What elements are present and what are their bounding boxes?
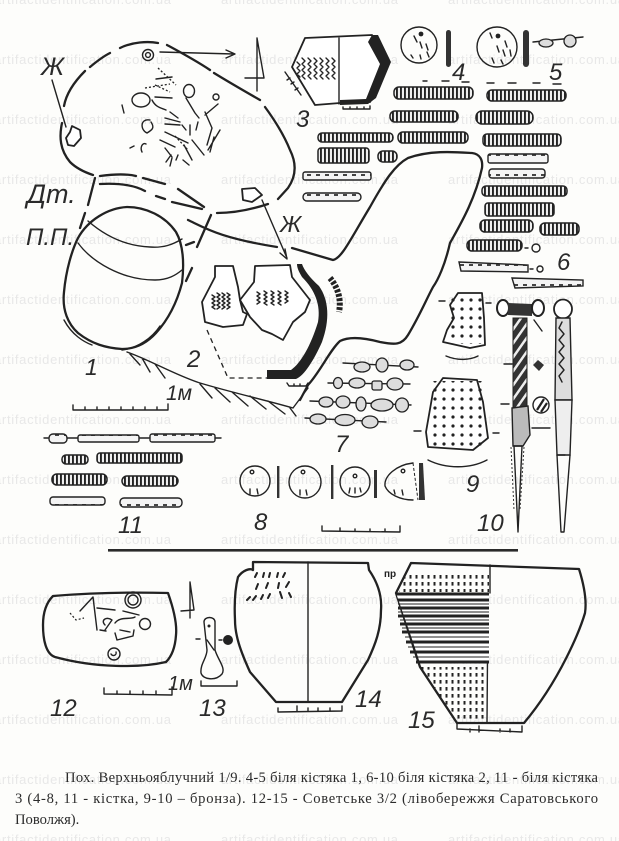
figure 3: vessel — [285, 35, 391, 133]
watermark grid: artifactidentification.com.ua — [221, 352, 399, 367]
figure 12: lower burial plan: 12 — [50, 695, 77, 722]
watermark grid: artifactidentification.com.ua — [221, 652, 399, 667]
figure 4: disc and label — [401, 27, 465, 86]
figure 10: hammer-headed pin and second pin: 10 — [477, 510, 504, 537]
scale bar 1m — [73, 382, 192, 410]
dromos dashed lines — [80, 174, 211, 281]
figure 15: decorated vessel: пр — [384, 569, 396, 580]
caption: Поволжя). — [15, 812, 79, 828]
caption: 3 (4-8, 11 - кістка, 9-10 – бронза). 12-15 - Советське 3/2 (лівобережжя Саратовського — [15, 791, 598, 807]
figure 15: decorated vessel: 15 — [408, 707, 435, 734]
figure 9: dotted bronze sheet — [414, 378, 499, 498]
north arrow small — [181, 582, 194, 618]
watermark grid: artifactidentification.com.ua — [221, 592, 399, 607]
sloping ground hatching — [127, 352, 308, 416]
watermark grid: artifactidentification.com.ua — [221, 52, 399, 67]
watermark grid: artifactidentification.com.ua — [221, 172, 399, 187]
lower Zh marker — [242, 188, 303, 259]
orientation label: Дт. — [24, 179, 76, 209]
figure 10: hammer-headed pin and second pin — [477, 300, 572, 537]
skeleton remains — [122, 68, 220, 166]
upper dotted sherd — [439, 293, 491, 359]
scale bar 1m: 1м — [166, 382, 192, 405]
ring with arrow — [142, 50, 235, 60]
figure 2: vessels — [186, 264, 327, 386]
figure 5: disc and beads — [477, 27, 583, 86]
upper Zh marker — [39, 53, 81, 146]
upper Zh marker: Ж — [39, 53, 66, 81]
watermark grid: artifactidentification.com.ua — [221, 232, 399, 247]
bead strings 6 — [303, 87, 583, 288]
scale bar 1m lower — [104, 673, 193, 695]
north arrow — [245, 38, 264, 91]
figure 3: vessel: 3 — [296, 106, 310, 133]
irregular chamber outline — [188, 152, 482, 400]
watermark grid: artifactidentification.com.ua — [221, 292, 399, 307]
figure 2: vessels: 2 — [186, 346, 200, 373]
lower Zh marker: Ж — [279, 211, 303, 237]
small bead chain — [330, 278, 340, 312]
watermark grid: artifactidentification.com.ua — [221, 472, 399, 487]
figure 8: perforated discs — [240, 463, 425, 536]
figure 8: perforated discs: 8 — [254, 509, 268, 536]
dash marks — [423, 81, 561, 84]
divider line — [108, 549, 518, 552]
large oval pit — [64, 207, 183, 349]
figure 1: burial plan — [24, 38, 303, 350]
figure 7: bead strings — [305, 358, 418, 458]
figure 11: bead strings — [44, 434, 221, 539]
figure 15: decorated vessel — [384, 563, 586, 734]
depth label: П.П. — [26, 224, 74, 251]
figure number 1: 1 — [85, 354, 98, 380]
watermark grid: artifactidentification.com.ua — [221, 532, 399, 547]
bead strings 6: 6 — [557, 249, 571, 276]
figure 12: lower burial plan — [43, 592, 176, 722]
watermark grid: artifactidentification.com.ua — [221, 712, 399, 727]
watermark grid: artifactidentification.com.ua — [221, 412, 399, 427]
caption — [15, 770, 599, 828]
figure 11: bead strings: 11 — [118, 512, 143, 539]
scale bar 1m lower: 1м — [168, 673, 193, 695]
figure 14: vessel — [235, 562, 382, 713]
figure 4: disc and label: 4 — [452, 59, 465, 86]
arcs across oval — [64, 221, 182, 350]
caption: Пох. Верхньояблучний 1/9. 4-5 біля кістяка 1, 6-10 біля кістяка 2, 11 - біля кістяка — [65, 770, 599, 786]
figure 5: disc and beads: 5 — [549, 59, 563, 86]
figure 7: bead strings: 7 — [335, 431, 350, 458]
figure 14: vessel: 14 — [355, 686, 382, 713]
watermark grid: artifactidentification.com.ua — [221, 772, 399, 787]
scale bar figures 7-10 — [322, 526, 400, 532]
figure 13: pin — [196, 618, 237, 722]
burial pit dashed outline — [61, 42, 295, 213]
figure 9: dotted bronze sheet: 9 — [466, 471, 479, 498]
watermark grid: artifactidentification.com.ua — [221, 112, 399, 127]
figure 13: pin: 13 — [199, 695, 226, 722]
